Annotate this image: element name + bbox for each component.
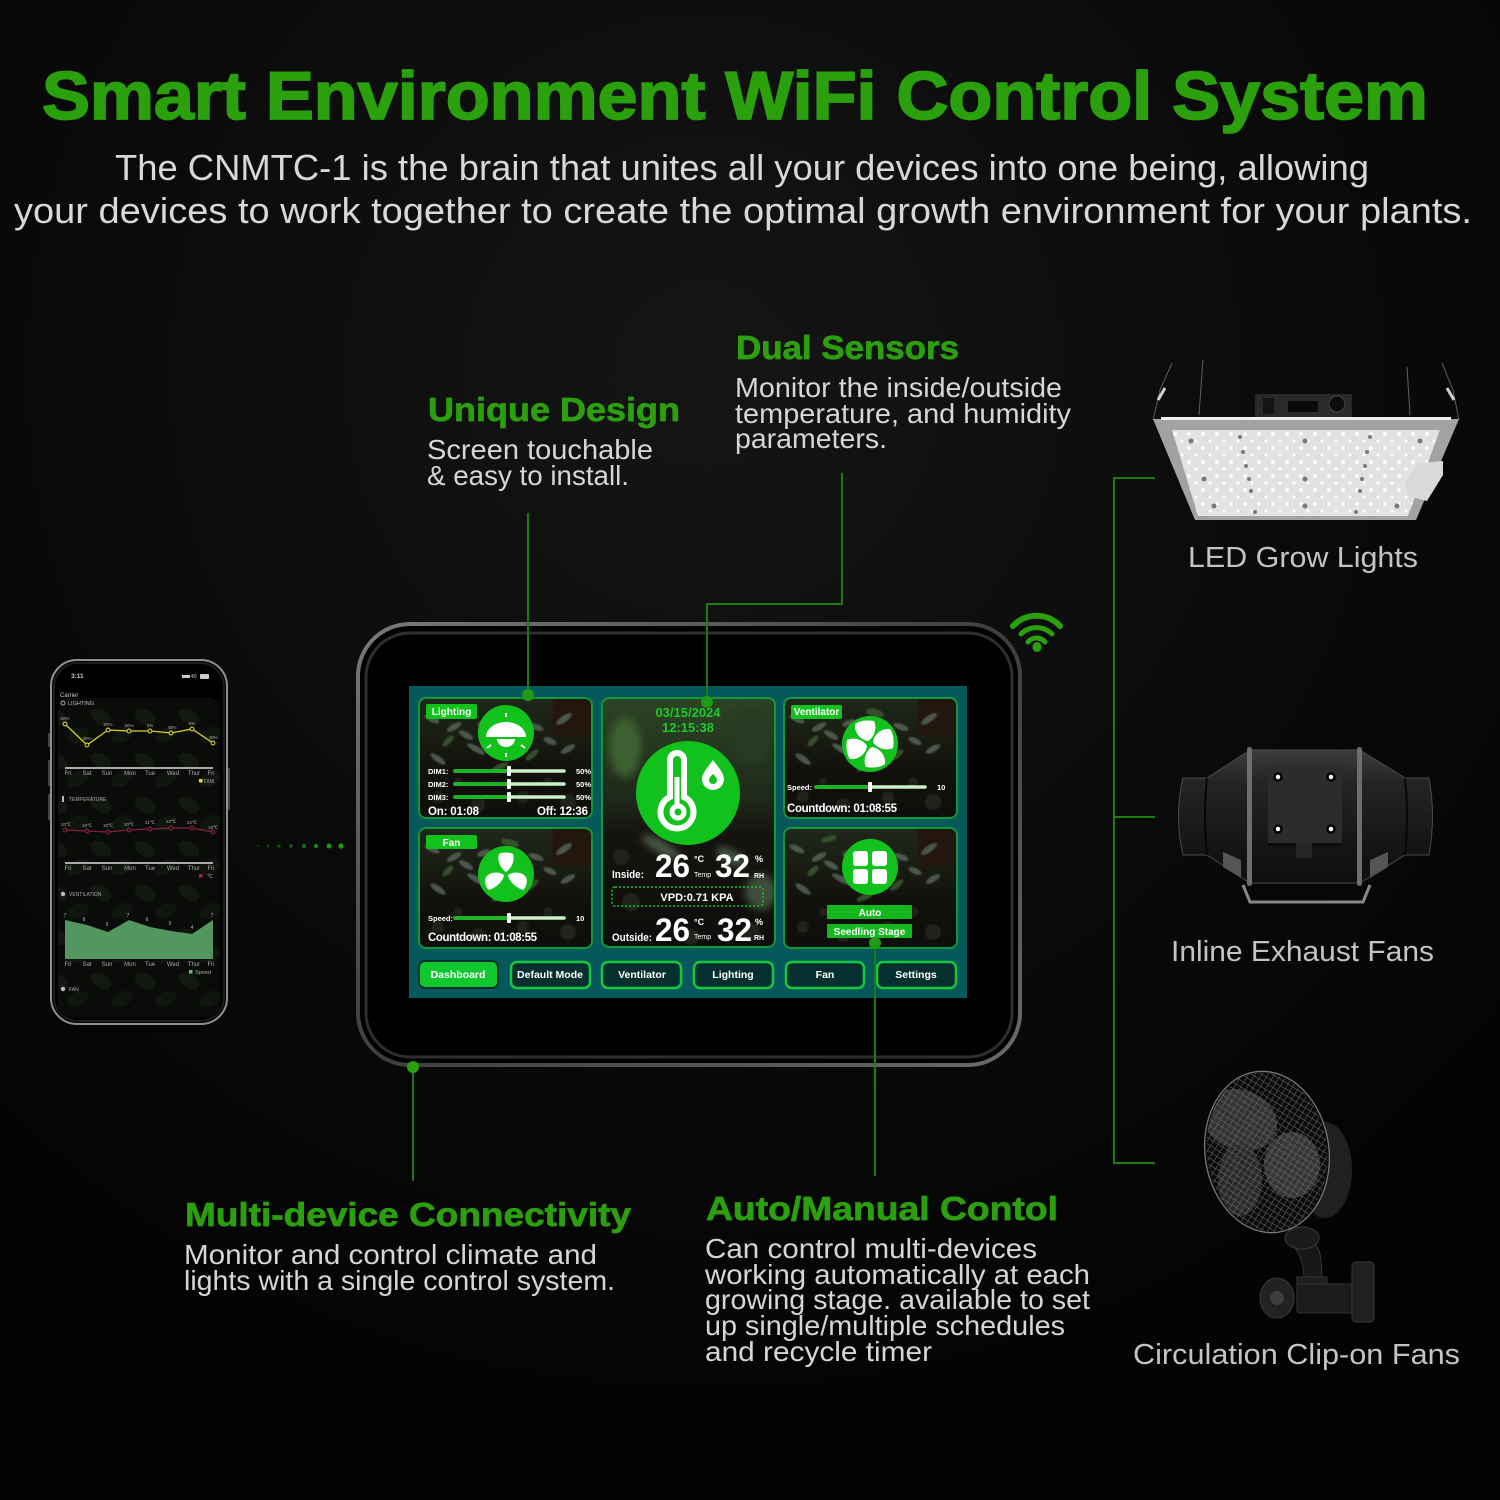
panel: lighting: Lighting bbox=[432, 707, 471, 718]
panel: climate readings: Inside: bbox=[612, 869, 644, 881]
screen bbox=[409, 686, 967, 998]
panel: climate readings: Outside: bbox=[612, 932, 652, 944]
chart: temperature: 20℃ bbox=[61, 822, 72, 827]
chart: temperature: Sun bbox=[102, 866, 112, 872]
chart: temperature: 19℃ bbox=[103, 823, 114, 828]
chart: temperature: 20℃ bbox=[124, 822, 135, 827]
nav buttons: Dashboard bbox=[431, 969, 485, 981]
chart: lighting: 50% bbox=[103, 722, 113, 727]
chart: lighting: LIGHTING bbox=[68, 701, 94, 707]
panel: lighting: 50% bbox=[576, 793, 591, 802]
chart: ventilation: 7 bbox=[127, 913, 130, 919]
chart: temperature: 22℃ bbox=[166, 819, 177, 824]
intro text bbox=[14, 147, 1472, 231]
nav buttons: Lighting bbox=[712, 969, 754, 981]
panel: fan bbox=[418, 827, 593, 949]
chart: temperature: Wed bbox=[167, 866, 179, 872]
panel: fan: Fan bbox=[443, 838, 460, 849]
device: circulation clip-on fan bbox=[1194, 1063, 1374, 1322]
chart: temperature: Mon bbox=[124, 866, 136, 872]
chart: ventilation bbox=[61, 892, 214, 976]
chart: ventilation: 5 bbox=[106, 922, 109, 928]
chart: temperature: Fri bbox=[208, 866, 214, 872]
chart: lighting: Sat bbox=[82, 771, 92, 777]
callout: unique design: Unique Design bbox=[428, 391, 680, 428]
nav buttons: Ventilator bbox=[618, 969, 666, 981]
panel: ventilator bbox=[783, 697, 958, 819]
callout: dual sensors: Dual Sensors bbox=[736, 329, 959, 366]
panel: lighting: DIM1: bbox=[428, 767, 448, 776]
chart: lighting: 60% bbox=[60, 716, 70, 721]
connector: unique design bbox=[522, 513, 534, 701]
chart: ventilation: 7 bbox=[211, 913, 214, 919]
chart: temperature: Thur bbox=[188, 866, 200, 872]
callout: auto manual control: working automatically at each bbox=[704, 1259, 1090, 1290]
callout: multi-device connectivity: Multi-device Connectivity bbox=[185, 1196, 632, 1233]
chart: lighting: Mon bbox=[124, 771, 136, 777]
chart: ventilation: Speed bbox=[195, 970, 211, 976]
bracket: connected devices bbox=[1114, 478, 1155, 1163]
chart: ventilation: 5 bbox=[169, 921, 172, 927]
device: LED grow light bbox=[1153, 360, 1459, 520]
chart: temperature: Sat bbox=[82, 866, 92, 872]
panel: ventilator: 10 bbox=[937, 783, 945, 792]
panel: lighting: 50% bbox=[576, 780, 591, 789]
panel: climate readings: Temp bbox=[694, 934, 711, 941]
callout: auto manual control: growing stage. available to set bbox=[705, 1284, 1090, 1315]
callout: unique design: & easy to install. bbox=[427, 460, 629, 491]
callout: auto manual control: up single/multiple schedules bbox=[705, 1310, 1065, 1341]
callout: unique design: Screen touchable bbox=[427, 434, 653, 465]
phone status bar: 40 bbox=[191, 674, 197, 680]
callout: auto manual control bbox=[704, 1190, 1090, 1367]
chart: lighting: Wed bbox=[167, 771, 179, 777]
callout: multi-device connectivity: Monitor and control climate and bbox=[184, 1239, 597, 1270]
panel: mode bbox=[783, 827, 958, 949]
panel: climate readings: % bbox=[755, 917, 763, 927]
panel: fan: 10 bbox=[576, 914, 584, 923]
nav buttons bbox=[419, 961, 956, 988]
panel: climate readings: °C bbox=[694, 854, 705, 864]
label: inline exhaust fans: Inline Exhaust Fans bbox=[1171, 936, 1434, 968]
panel: fan: Countdown: 01:08:55 bbox=[428, 932, 538, 944]
chart: ventilation: 6 bbox=[146, 917, 149, 923]
panel: ventilator: Countdown: 01:08:55 bbox=[787, 803, 898, 815]
nav buttons: Settings bbox=[895, 969, 937, 981]
chart: temperature: TEMPERATURE bbox=[69, 797, 107, 803]
chart: ventilation: 4 bbox=[191, 925, 194, 931]
panel: climate readings: 03/15/2024 bbox=[655, 705, 721, 720]
panel: fan: Speed: bbox=[428, 914, 453, 923]
chart: ventilation: Thur bbox=[188, 962, 200, 968]
chart: ventilation: Sat bbox=[82, 962, 92, 968]
chart: temperature: 22℃ bbox=[187, 820, 198, 825]
chart: temperature bbox=[61, 796, 219, 880]
chart: ventilation: Fri bbox=[208, 962, 214, 968]
panel: climate readings: VPD:0.71 KPA bbox=[660, 892, 734, 904]
chart: lighting: 40% bbox=[208, 735, 218, 740]
callout: auto manual control: and recycle timer bbox=[705, 1336, 932, 1367]
chart: temperature: 21℃ bbox=[145, 820, 156, 825]
panel: mode: Auto bbox=[859, 908, 881, 919]
panel: climate readings bbox=[601, 697, 777, 948]
panel: climate readings: RH bbox=[754, 935, 764, 942]
callout: auto manual control: Auto/Manual Contol bbox=[706, 1190, 1058, 1227]
chart: lighting: DIM bbox=[204, 779, 214, 785]
chart: temperature: Fri bbox=[64, 866, 72, 872]
callout: auto manual control: Can control multi-devices bbox=[705, 1233, 1037, 1264]
chart: lighting: 30% bbox=[82, 736, 92, 741]
callout: multi-device connectivity bbox=[184, 1196, 632, 1296]
callout: dual sensors: temperature, and humidity bbox=[735, 398, 1071, 429]
chart: ventilation: VENTILATION bbox=[69, 892, 102, 898]
chart: lighting: Sun bbox=[102, 771, 112, 777]
chart: lighting: Fri bbox=[64, 771, 72, 777]
chart: lighting: Tue bbox=[145, 771, 156, 777]
callout: multi-device connectivity: lights with a single control system. bbox=[184, 1265, 615, 1296]
nav buttons: Fan bbox=[816, 969, 834, 981]
chart: lighting: 45% bbox=[167, 725, 177, 730]
chart: ventilation: Mon bbox=[124, 962, 136, 968]
panel: lighting: 50% bbox=[576, 767, 591, 776]
panel: climate readings: 32 bbox=[715, 848, 750, 884]
device: inline exhaust fan bbox=[1178, 747, 1432, 902]
nav buttons: Default Mode bbox=[517, 969, 583, 981]
chart: lighting bbox=[60, 701, 218, 785]
chart: ventilation: 6 bbox=[83, 917, 86, 923]
callout: unique design bbox=[427, 391, 680, 491]
chart: lighting: 5% bbox=[147, 723, 153, 728]
label: LED grow lights: LED Grow Lights bbox=[1188, 542, 1418, 574]
chart: lighting: 5% bbox=[189, 721, 195, 726]
intro text: your devices to work together to create the optimal growth environment for your plants. bbox=[14, 190, 1472, 231]
chart: ventilation: Tue bbox=[145, 962, 156, 968]
panel: lighting bbox=[418, 697, 593, 819]
chart: ventilation: 7 bbox=[64, 913, 67, 919]
panel: climate readings: °C bbox=[694, 917, 705, 927]
panel: ventilator: Speed: bbox=[787, 783, 812, 792]
chart: lighting: Thur bbox=[188, 771, 200, 777]
chart: lighting: Fri bbox=[208, 771, 214, 777]
chart: temperature: Tue bbox=[145, 866, 156, 872]
panel: climate readings: 26 bbox=[655, 912, 690, 948]
dotted link: phone to controller bbox=[247, 843, 344, 849]
panel: lighting: DIM2: bbox=[428, 780, 448, 789]
chart: temperature: 19℃ bbox=[82, 823, 93, 828]
chart: ventilation: Wed bbox=[167, 962, 179, 968]
panel: climate readings: RH bbox=[754, 873, 764, 880]
chart: temperature: ℃ bbox=[207, 874, 214, 880]
chart: temperature: 19℃ bbox=[208, 825, 219, 830]
fan section label: FAN bbox=[69, 987, 79, 993]
panel: lighting: DIM3: bbox=[428, 793, 448, 802]
chart: lighting: 50% bbox=[124, 723, 134, 728]
panel: ventilator: Ventilator bbox=[794, 707, 839, 718]
label: circulation clip-on fans: Circulation Clip-on Fans bbox=[1133, 1339, 1460, 1371]
panel: climate readings: 26 bbox=[655, 848, 690, 884]
icon: thermometer and droplet bbox=[660, 753, 724, 828]
controller device bbox=[358, 624, 1020, 1065]
phone status bar: Carrier bbox=[60, 693, 78, 699]
phone status bar: 3:11 bbox=[71, 673, 84, 680]
icon: wifi bbox=[1013, 616, 1060, 652]
connector: dual sensors bbox=[701, 473, 842, 708]
callout: dual sensors: parameters. bbox=[735, 423, 887, 454]
panel: lighting: On: 01:08 bbox=[428, 806, 480, 818]
phone status bar bbox=[60, 673, 209, 699]
chart: ventilation: Sun bbox=[102, 962, 112, 968]
title: Smart Environment WiFi Control System bbox=[42, 58, 1428, 134]
panel: mode: Seedling Stage bbox=[834, 927, 906, 938]
connector: multi-device connectivity bbox=[407, 1061, 419, 1181]
panel: climate readings: Temp bbox=[694, 872, 711, 879]
chart: ventilation: Fri bbox=[64, 962, 72, 968]
panel: climate readings: 32 bbox=[717, 912, 752, 948]
fan section label bbox=[61, 987, 79, 993]
connector: auto manual control bbox=[869, 937, 881, 1176]
panel: climate readings: % bbox=[755, 854, 763, 864]
callout: dual sensors: Monitor the inside/outside bbox=[735, 372, 1062, 403]
intro text: The CNMTC-1 is the brain that unites all your devices into one being, allowing bbox=[115, 147, 1369, 188]
panel: lighting: Off: 12:36 bbox=[537, 806, 588, 818]
panel: climate readings: 12:15:38 bbox=[662, 720, 714, 735]
callout: dual sensors bbox=[735, 329, 1071, 454]
phone app bbox=[48, 660, 230, 1024]
